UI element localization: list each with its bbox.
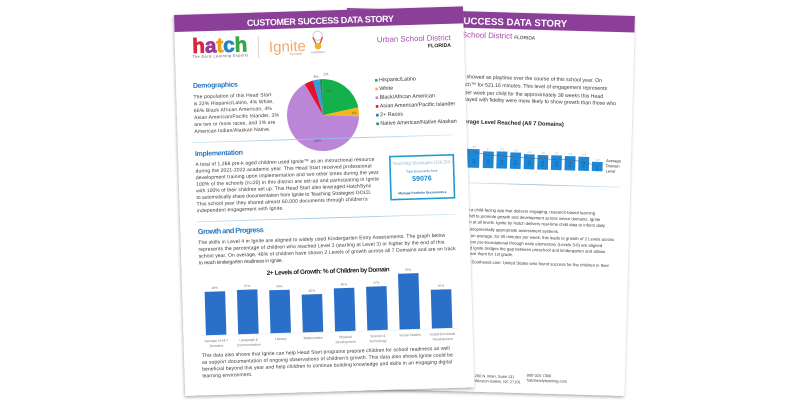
panel: demographics <box>193 68 457 155</box>
bar chart: Communication <box>237 343 261 347</box>
demographics heading: Demographics <box>193 82 238 90</box>
back page bar chart: 2 <box>513 160 518 167</box>
bar chart: 46% <box>341 282 347 286</box>
back page footer contact <box>527 373 567 384</box>
growth text: school year. On average, 46% of children have shown 2 Levels of growth across all 7 Domains and are on track <box>199 246 456 260</box>
back page bar chart: 2 <box>568 161 572 168</box>
demographics text: is 22% Hispanic/Latino, 4% White, <box>194 99 274 107</box>
logo: Ignite: Ignite <box>269 38 306 56</box>
back page program paragraphs: When children play, on average, for 30 minutes per week, this leads to growth of 2 Levels across <box>433 232 614 242</box>
back page header band <box>347 8 635 33</box>
back page bar chart: 2 <box>554 161 559 168</box>
implementation text: independent engagement with Ignite. <box>197 206 284 214</box>
closing text <box>202 346 454 379</box>
back page chart legend label: Average <box>606 158 622 163</box>
back page bar chart: 2.7 <box>487 147 491 151</box>
bar chart: Science & <box>370 334 386 338</box>
implementation text: A total of 1,268 pre-k aged children used Ignite™ as an instructional resource <box>195 157 375 168</box>
back page program paragraphs: all domains. Levels from pre-foundational through early elementary (Levels 3-6) are aligned <box>430 238 603 248</box>
back page bar chart: 2.5 <box>555 151 559 155</box>
back page bar chart: 1 <box>595 165 599 172</box>
panel: implementation <box>195 143 455 214</box>
pie legend <box>375 75 457 127</box>
back page program paragraphs: experiences that shift to promote growth and development across seven domains. Ignite <box>435 212 601 222</box>
back page footer address <box>475 373 521 384</box>
bar chart: 45% <box>438 284 444 288</box>
back page footer contact: 800-324-7368 <box>527 373 551 378</box>
growth text: to reach kindergarten readiness in Ignite. <box>199 258 283 266</box>
back page bar chart: 3 <box>527 160 531 167</box>
pie legend: Asian American/Pacific Islander <box>380 101 456 110</box>
back page program paragraphs: adapts to children at all levels. Ignite by Hatch delivers real-time child data to inform daily <box>438 218 606 228</box>
back page chart legend label <box>606 158 622 174</box>
bar chart: 46% <box>211 286 218 290</box>
logo: by hatch: by hatch <box>290 52 303 56</box>
back page engagement paragraph: Children in this Head Start showed as playtime over the course of this school year. On <box>405 73 602 84</box>
back page engagement paragraph: approximately 14 minutes per week per child for the approximately 38 weeks this Head <box>404 88 603 100</box>
bar chart: 47% <box>373 281 380 285</box>
pie legend: White <box>379 86 393 92</box>
pie legend: Hispanic/Latino <box>379 76 416 83</box>
bar chart: Language & <box>239 338 259 342</box>
back page bar chart: 2 <box>582 162 586 169</box>
pie legend: Black/African American <box>379 93 435 101</box>
implementation text: with 100% of their children set up. This Head Start also leveraged HatchSync <box>196 183 372 194</box>
pie chart: 4% <box>351 111 357 115</box>
demographics text: 66% Black African American, 4% <box>194 106 272 114</box>
back page program paragraphs: to standards, and Ignite bridges the gap between preschool and kindergarten and allows <box>439 244 605 254</box>
demographics text <box>193 92 280 135</box>
callout: documents sent: Teaching Strategies GOLD® <box>392 158 451 166</box>
logo: hatch: hatch <box>192 33 248 58</box>
implementation text: This school year they shared almost 60,000 documents through children's <box>197 197 368 208</box>
back page footer address: Winston-Salem, NC 27101 <box>475 378 521 384</box>
demographics text: American Indian/Alaskan Native. <box>194 127 271 135</box>
front page sheet <box>174 6 474 396</box>
bar chart: Development <box>432 337 453 341</box>
back page bar chart: 2 <box>541 161 545 168</box>
implementation text: 100% of the schools (n=20) in this district are set-up and participating in Ignite <box>196 176 379 188</box>
back page footer contact: hatchearlylearning.com <box>527 378 567 384</box>
back page engagement paragraph <box>382 72 617 107</box>
bar chart: Average of All 7 <box>204 339 228 343</box>
pie legend: 2+ Races <box>380 112 403 118</box>
bar chart: 59% <box>405 268 411 272</box>
back page program paragraphs: instruction and developmentally appropriate assessment systems. <box>435 226 559 234</box>
back page program paragraphs: Hatch is based in the Southwest.com: United States who found success for the children in their <box>431 258 610 268</box>
implementation heading: Implementation <box>195 150 243 158</box>
back page bar chart: 2.4 <box>582 153 586 157</box>
back page bar chart: 2 <box>486 159 490 166</box>
back page chart legend label: Level <box>606 168 615 174</box>
demographics text: Asian American/Pacific Islander, 3% <box>194 113 280 121</box>
closing text: as support documentation of ongoing observations of children's growth. This data also shows Ignite could be <box>202 352 453 366</box>
growth text: The skills in Level 4 in Ignite are aligned to widely used Kindergarten Entry Assessments. The graph below <box>198 233 446 246</box>
closing text: beneficial beyond this year and help children to continue building knowledge and skills in an engaging digital <box>202 359 452 373</box>
back page bar chart: 2.6 <box>514 148 518 152</box>
bar chart: Literacy <box>275 337 287 341</box>
implementation text: during the 2021-2022 academic year. This Head Start received professional <box>196 163 372 175</box>
bar chart title: 2+ Levels of Growth: % of Children by Domain <box>267 266 390 277</box>
closing text: This data also shows that Ignite can help Head Start programs prepare children for school readiness as well <box>202 346 450 359</box>
callout: documents sent: Total Documents Sent <box>406 169 437 174</box>
demographics text: are two or more races, and 1% are <box>194 120 276 128</box>
callout: documents sent: 59076 <box>412 175 432 183</box>
back page bar chart: 3.1 <box>472 145 477 149</box>
back page divider <box>465 182 620 187</box>
back page chart legend label: Domain <box>606 163 620 169</box>
logo divider <box>258 36 259 58</box>
back page <box>336 8 635 396</box>
back page state: FLORIDA <box>514 35 536 42</box>
back page footer address: 200 N. Main, Suite 131 <box>475 373 514 379</box>
back page bar chart: 3 <box>472 159 476 166</box>
icon: medal <box>310 31 326 53</box>
back page bar chart: 2.4 <box>568 152 573 156</box>
back page district: Urban School District <box>438 30 513 41</box>
bar chart: Technology <box>369 339 387 343</box>
district name: Urban School District <box>377 33 452 44</box>
back page engagement paragraph: Start used Ignite. Children who played with fidelity were more likely to show growth than those who <box>390 95 616 107</box>
growth text <box>198 232 456 266</box>
bar chart: Mathematics <box>304 336 323 340</box>
pie chart: 3% <box>313 75 318 79</box>
callout: documents sent <box>390 155 455 200</box>
bar chart <box>199 266 459 348</box>
pie chart: 1% <box>323 72 328 76</box>
panel: growth and progress <box>197 219 460 379</box>
front page <box>174 6 474 396</box>
pie chart: 4% <box>309 85 315 89</box>
back page bar chart: 2 <box>500 159 504 167</box>
back page program paragraphs <box>430 206 615 268</box>
implementation text <box>195 157 381 214</box>
back page program paragraphs: Ignite by Hatch is a child-facing app that delivers engaging, research-based learning <box>437 206 596 216</box>
title: CUSTOMER SUCCESS DATA STORY <box>247 14 394 28</box>
back page bar chart: 2.5 <box>541 151 545 155</box>
pie chart <box>286 71 360 152</box>
bar chart: Physical <box>339 335 352 339</box>
implementation text: development training upon implementation and two other times during the year. <box>196 170 380 181</box>
back page program paragraphs: and prepare them for 1st grade. <box>453 250 513 257</box>
growth heading: Growth and Progress <box>198 225 264 236</box>
logo tagline: The Early Learning Experts <box>192 52 248 59</box>
back page bar chart <box>463 144 603 172</box>
pie chart: 22% <box>325 89 332 93</box>
back page bar chart: 1.6 <box>596 158 600 162</box>
bar chart: 47% <box>244 284 250 288</box>
closing text: learning environment. <box>202 372 253 379</box>
bar chart: Social Studies <box>399 333 421 337</box>
back page sheet <box>336 8 635 396</box>
bar chart: Domains <box>210 344 223 348</box>
pie chart: 66% <box>314 139 321 143</box>
back page bar chart: 2.7 <box>500 147 505 151</box>
state name: FLORIDA <box>428 43 451 49</box>
bar chart: 45% <box>276 284 283 288</box>
back page chart title: Average Level Reached (All 7 Domains) <box>457 119 564 128</box>
bar chart: Development <box>336 340 356 344</box>
implementation text: to automatically share documentation from Ignite to Teaching Strategies GOLD. <box>196 190 371 201</box>
callout: documents sent: Manage Portfolio Documents ▸ <box>398 190 447 195</box>
bar chart: Social-Emotional <box>430 332 455 337</box>
bar chart: 40% <box>309 289 315 293</box>
back page title: CUSTOMER SUCCESS DATA STORY <box>399 14 568 30</box>
header band <box>174 6 463 32</box>
growth text: represents the percentage of children who reached Level 3 (starting at Level 3) or higher by the end of this <box>198 240 445 253</box>
pie legend: Native American/Native Alaskan <box>380 119 457 127</box>
back page engagement paragraph: average, children used Ignite by Hatch™ for 521.16 minutes. This level of engagement represents <box>382 80 608 92</box>
back page bar chart: 2.5 <box>528 150 532 154</box>
demographics text: The population of this Head Start <box>193 92 272 100</box>
